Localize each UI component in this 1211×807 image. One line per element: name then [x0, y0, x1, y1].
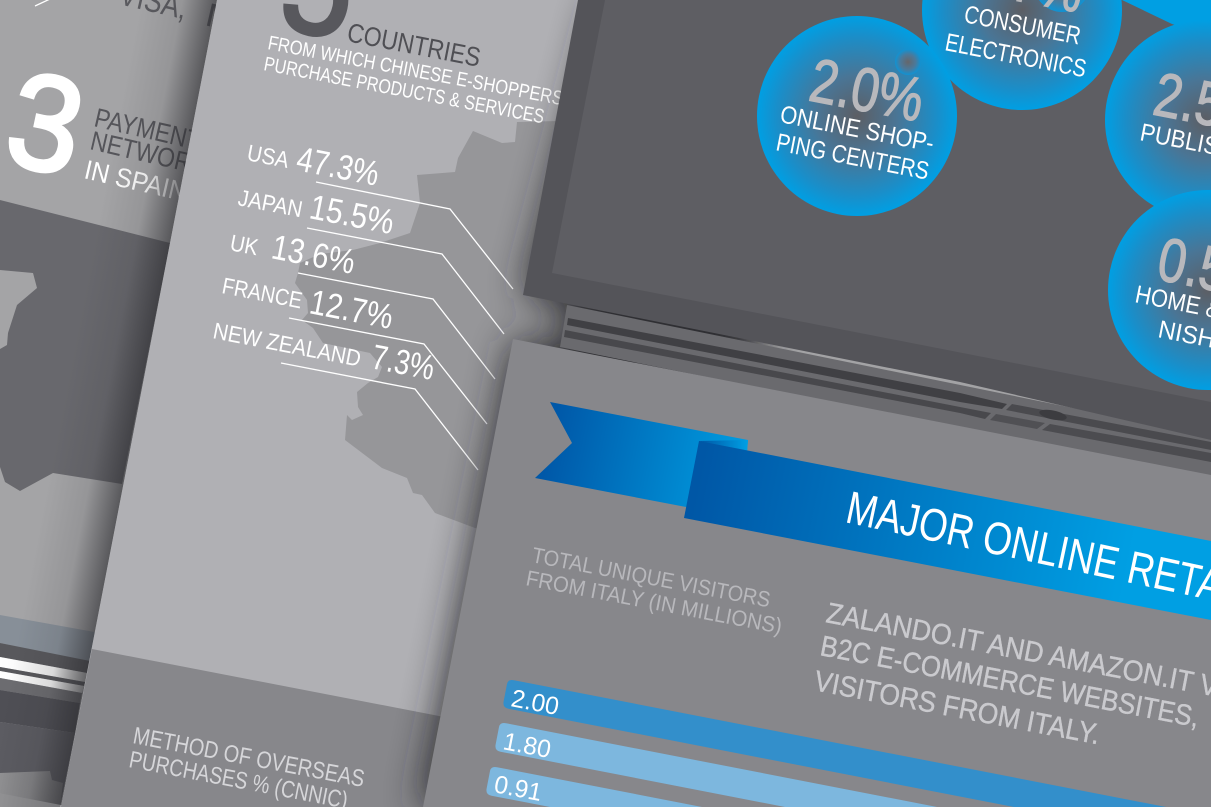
- bubble: top right sector: [1122, 0, 1211, 38]
- bar 2.00: 2.00: [509, 684, 561, 721]
- country list: UK: [228, 229, 261, 260]
- country list: 12.7%: [306, 283, 396, 337]
- country list: 47.3%: [293, 140, 382, 194]
- decorative tick at top: [35, 0, 50, 6]
- bubble: online shopping centers: [757, 16, 957, 216]
- heading: visa text: [116, 0, 240, 39]
- bar chart: [486, 680, 1166, 807]
- bar 1.80: 1.80: [501, 727, 553, 764]
- bubble: online shopping centers: PING CENTERS: [774, 128, 931, 185]
- map shape: light land: [0, 270, 37, 349]
- leader lines: [281, 182, 513, 470]
- panel: Spain payment networks (left page): [0, 0, 260, 807]
- bubble: online shopping centers: ONLINE SHOP-: [778, 100, 936, 158]
- text: countries from which Chinese e-shoppers purchase: COUNTRIES: [345, 17, 483, 73]
- country list: 13.6%: [268, 228, 358, 282]
- text: payment networks in Spain: IN SPAIN: [82, 155, 190, 207]
- country list: [211, 139, 438, 388]
- panel: dark retail sectors panel: [523, 0, 1211, 440]
- chart caption: FROM ITALY (IN MILLIONS): [524, 565, 784, 639]
- stripes: [0, 643, 90, 807]
- body text: VISITORS FROM ITALY.: [812, 665, 1103, 751]
- bubble: publishing: [1105, 20, 1211, 220]
- lower map shape: [0, 771, 63, 807]
- text: method of overseas purchases: METHOD OF OVERSEAS: [131, 722, 367, 793]
- bubble: online shopping centers: 2.0%: [804, 46, 929, 135]
- text: payment networks in Spain: NETWORK: [88, 126, 209, 181]
- country list: 7.3%: [368, 338, 438, 388]
- ribbon fold: [699, 440, 748, 452]
- bar 0.91: [486, 767, 702, 807]
- country list: JAPAN: [236, 184, 305, 222]
- country list: USA: [245, 139, 292, 173]
- bubble: consumer electronics: CONSUMER: [962, 0, 1083, 50]
- bar 2.00: [503, 680, 1166, 807]
- country list: 15.5%: [306, 188, 397, 242]
- text: countries from which Chinese e-shoppers purchase: FROM WHICH CHINESE E-SHOPPERS: [266, 32, 565, 110]
- country list: FRANCE: [220, 272, 305, 313]
- country list: NEW ZEALAND: [211, 317, 363, 372]
- lower band of middle page: [61, 649, 470, 807]
- ribbon tail: [535, 402, 748, 507]
- bar 1.80: [495, 723, 937, 807]
- lower blue-grey band: [0, 615, 100, 662]
- text: countries from which Chinese e-shoppers purchase: PURCHASE PRODUCTS & SERVICES: [262, 53, 546, 128]
- text: payment networks in Spain: PAYMENT: [92, 103, 204, 156]
- panel: major online retailers: [423, 339, 1211, 807]
- bubble: consumer electronics: [922, 0, 1122, 110]
- chart caption: TOTAL UNIQUE VISITORS: [530, 542, 772, 612]
- map band: [0, 200, 170, 491]
- map of China coast: [295, 120, 600, 540]
- panel: China overseas purchases (middle page): [61, 0, 760, 807]
- bubble: consumer electronics: ELECTRONICS: [943, 28, 1089, 83]
- text: countries from which Chinese e-shoppers purchase: [262, 17, 565, 128]
- bar 0.91: 0.91: [492, 770, 544, 807]
- ribbon heading: [535, 402, 1211, 634]
- page shadow: [0, 0, 228, 805]
- bubble: home and furnishing: [1108, 190, 1211, 390]
- stripes under dark panel: [560, 305, 1211, 480]
- text: payment networks in Spain: [82, 103, 209, 207]
- ribbon front: [684, 441, 1211, 620]
- soft shadow cast by the neighbouring panels: [420, 0, 760, 807]
